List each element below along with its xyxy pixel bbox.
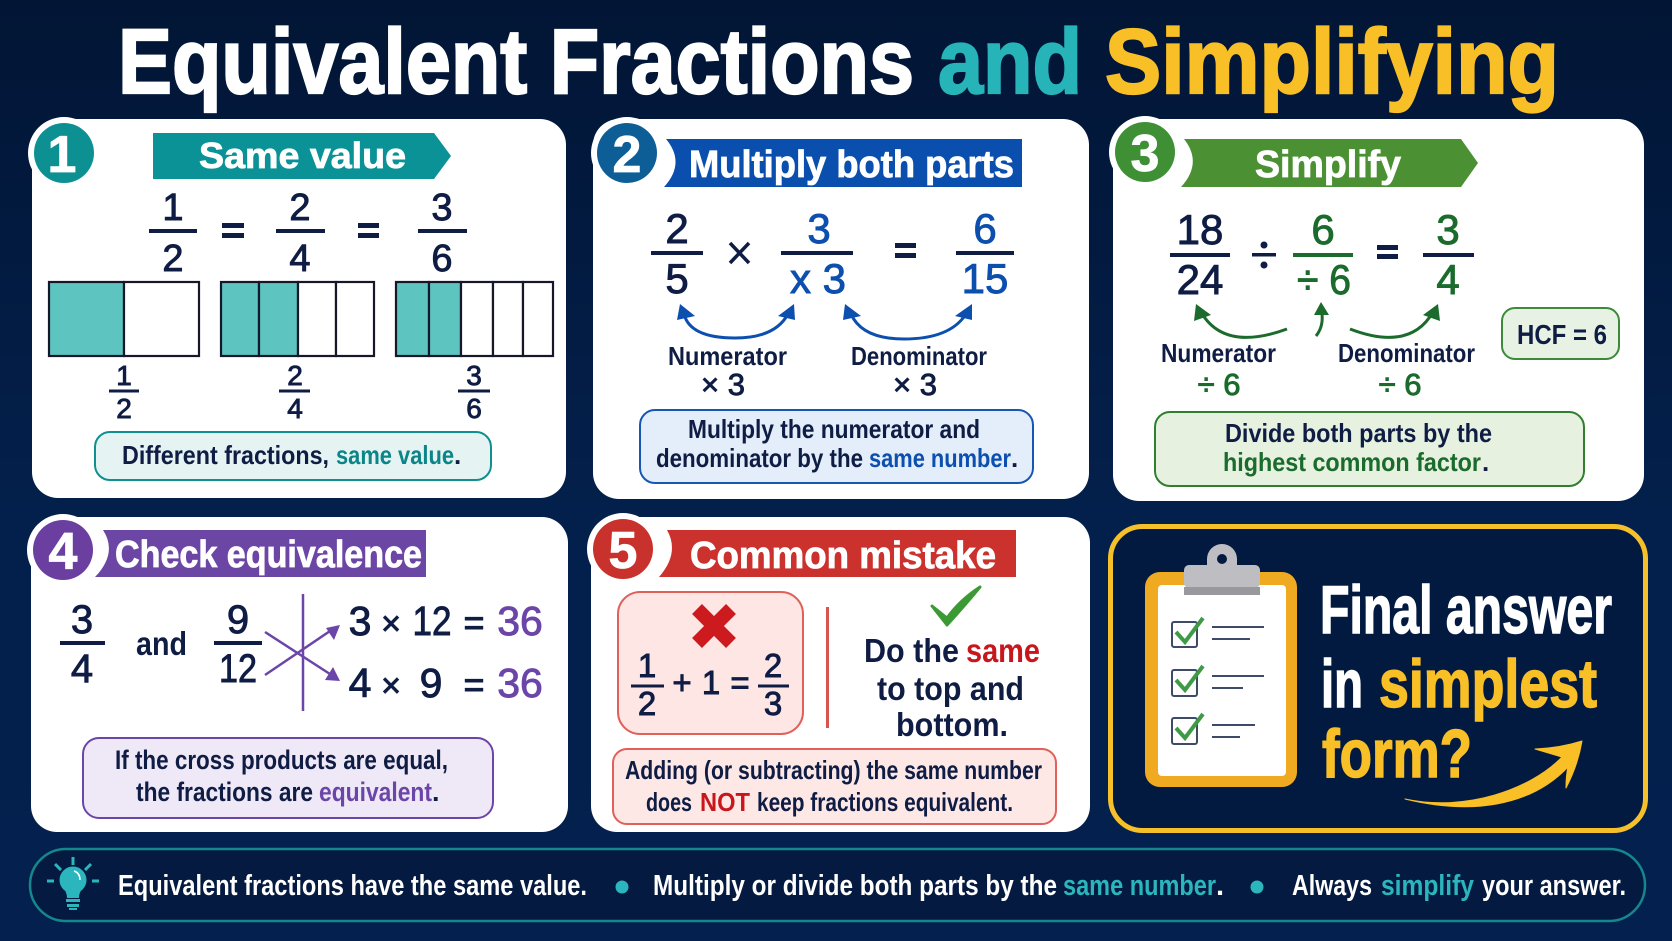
title: and xyxy=(938,11,1082,113)
tip: always simplify: your answer. xyxy=(1482,870,1626,902)
heading ribbon: simplify xyxy=(1181,139,1478,187)
small fraction labels: 4 xyxy=(287,393,303,424)
arrow: denominator multiply xyxy=(843,304,972,339)
badge 4 xyxy=(27,514,99,586)
callout: adding does not keep equivalent xyxy=(613,749,1056,824)
wrong equation: 2 xyxy=(638,685,656,722)
callout: different fractions, same value: Different fractions, xyxy=(122,440,329,470)
label: denominator divide by 6: Denominator xyxy=(1338,338,1475,368)
equation: two fifths times three over three equals six fifteenths: 15 xyxy=(962,255,1008,302)
callout: adding does not keep equivalent: does xyxy=(646,787,692,817)
cross product: 3 x 12 = 36 xyxy=(349,598,543,644)
cross product: 3 x 12 = 36: = xyxy=(463,602,485,643)
heading ribbon: common mistake: Common mistake xyxy=(690,535,996,577)
badge 3: 3 xyxy=(1131,125,1159,183)
wrong equation: + xyxy=(672,664,692,701)
panel 5: common mistake xyxy=(587,513,1090,832)
cross product: 3 x 12 = 36: × xyxy=(381,605,401,643)
title: Simplifying xyxy=(1105,11,1559,113)
arrow: divide denominator xyxy=(1350,304,1440,337)
callout: multiply numerator and denominator: . xyxy=(1011,443,1018,473)
equation: one half equals two quarters equals three sixths: 1 xyxy=(162,187,184,229)
arrow: divide numerator xyxy=(1194,304,1287,337)
callout: adding does not keep equivalent: NOT xyxy=(700,787,750,817)
cross product: 3 x 12 = 36: 3 xyxy=(349,598,371,644)
panel 3: simplify xyxy=(1109,116,1644,501)
title xyxy=(118,11,1559,113)
equation: eighteen twenty-fourths divided by six equals three quarters: 3 xyxy=(1436,206,1460,253)
wrong equation xyxy=(631,647,789,722)
tag: HCF = 6 xyxy=(1502,308,1619,359)
tag: HCF = 6: HCF = 6 xyxy=(1517,319,1607,350)
equation: eighteen twenty-fourths divided by six equals three quarters: ÷ 6 xyxy=(1297,256,1351,303)
fraction: nine twelfths: 12 xyxy=(219,647,257,691)
small fraction labels xyxy=(109,360,490,424)
label: denominator times 3: × 3 xyxy=(893,367,937,402)
equation: two fifths times three over three equals six fifteenths: x 3 xyxy=(790,255,846,302)
tip: multiply or divide: Multiply or divide both parts by the xyxy=(653,870,1057,902)
fraction bar: one half xyxy=(49,282,199,356)
label: numerator divide by 6: ÷ 6 xyxy=(1198,367,1240,402)
label: denominator divide by 6 xyxy=(1338,338,1475,402)
equation: eighteen twenty-fourths divided by six equals three quarters xyxy=(1170,206,1474,303)
equation: eighteen twenty-fourths divided by six equals three quarters: 18 xyxy=(1177,206,1223,253)
callout: multiply numerator and denominator: denominator by the xyxy=(656,443,863,473)
tip: always simplify xyxy=(1292,870,1626,902)
text: final answer in simplest form?: in xyxy=(1321,646,1363,722)
equation: one half equals two quarters equals three sixths: 4 xyxy=(289,238,311,280)
callout: multiply numerator and denominator: Multiply the numerator and xyxy=(688,414,980,444)
icon: light bulb xyxy=(47,857,99,910)
cross product: 4 x 9 = 36 xyxy=(349,660,543,706)
tip: always simplify: Always xyxy=(1292,870,1372,902)
title: Equivalent Fractions xyxy=(118,11,914,113)
badge 3 xyxy=(1109,116,1181,188)
tip: equivalent fractions: Equivalent fractions have the same value. xyxy=(118,870,587,902)
small fraction labels: 1 xyxy=(116,360,132,391)
text: do the same to top and bottom xyxy=(864,632,1040,743)
label: numerator divide by 6 xyxy=(1161,338,1276,402)
badge 5 xyxy=(587,513,659,585)
callout: different fractions, same value: . xyxy=(454,440,461,470)
small fraction labels: 2 xyxy=(116,393,132,424)
callout: adding does not keep equivalent: Adding (or subtracting) the same number xyxy=(625,755,1042,785)
heading ribbon: check equivalence: Check equivalence xyxy=(115,534,422,576)
text: do the same to top and bottom: bottom. xyxy=(896,706,1008,743)
callout: different fractions, same value: same value xyxy=(336,440,454,470)
equation: two fifths times three over three equals six fifteenths xyxy=(651,205,1014,302)
fraction: nine twelfths: 9 xyxy=(227,598,249,642)
callout: divide by highest common factor: . xyxy=(1482,447,1489,477)
callout: divide by highest common factor xyxy=(1155,412,1584,486)
equation: two fifths times three over three equals six fifteenths: 6 xyxy=(973,205,997,252)
heading ribbon: same value xyxy=(153,133,451,179)
arrow: HCF up xyxy=(1314,302,1329,336)
panel 4: check equivalence xyxy=(27,514,568,832)
text: do the same to top and bottom: same xyxy=(966,632,1040,669)
arrow: numerator multiply xyxy=(677,304,795,338)
divider line xyxy=(826,607,829,728)
label: numerator times 3: × 3 xyxy=(701,367,745,402)
label: numerator times 3: Numerator xyxy=(668,341,787,371)
badge 5: 5 xyxy=(609,522,637,580)
callout: multiply numerator and denominator: same number xyxy=(869,443,1011,473)
equation: one half equals two quarters equals three sixths: 3 xyxy=(431,187,453,229)
equation: two fifths times three over three equals six fifteenths: 5 xyxy=(665,255,689,302)
icon: red cross xyxy=(697,609,731,643)
fraction: three quarters: 3 xyxy=(71,598,93,642)
separator dot xyxy=(1250,880,1264,894)
word: and: and xyxy=(136,625,187,662)
callout: cross products equal: equivalent xyxy=(319,777,432,807)
text: final answer in simplest form? xyxy=(1320,572,1612,792)
equation: two fifths times three over three equals six fifteenths: 3 xyxy=(807,205,831,252)
callout: cross products equal: . xyxy=(432,777,440,807)
callout: cross products equal: If the cross products are equal, xyxy=(115,745,448,775)
badge 2: 2 xyxy=(613,126,641,184)
small fraction labels: 6 xyxy=(466,393,482,424)
fraction bar: two quarters xyxy=(221,282,374,356)
cross product: 4 x 9 = 36: 9 xyxy=(420,660,442,706)
badge 4: 4 xyxy=(49,523,78,581)
tip: always simplify: simplify xyxy=(1381,870,1474,902)
tip: multiply or divide: . xyxy=(1216,870,1224,902)
panel 6: final answer xyxy=(1110,526,1646,830)
callout: cross products equal: the fractions are xyxy=(136,777,313,807)
equation: eighteen twenty-fourths divided by six equals three quarters: 4 xyxy=(1436,256,1460,303)
badge 1: 1 xyxy=(48,126,76,184)
text: do the same to top and bottom: Do the xyxy=(864,632,959,669)
equation: one half equals two quarters equals three sixths: 2 xyxy=(162,238,184,280)
fraction: nine twelfths xyxy=(214,598,262,691)
wrong equation: 2 xyxy=(764,647,782,684)
wrong equation: = xyxy=(730,664,750,701)
cross product: 4 x 9 = 36: 4 xyxy=(349,660,371,706)
label: numerator times 3 xyxy=(668,341,787,402)
wrong example box xyxy=(618,592,803,734)
heading ribbon: same value: Same value xyxy=(199,135,406,176)
heading ribbon: multiply both parts: Multiply both parts xyxy=(689,144,1014,186)
fraction: three quarters xyxy=(60,598,105,691)
cross product: 4 x 9 = 36: = xyxy=(463,664,485,705)
panel 1: same value xyxy=(28,117,566,498)
equation: two fifths times three over three equals six fifteenths: 2 xyxy=(665,205,689,252)
separator dot xyxy=(616,880,628,894)
wrong equation: 1 xyxy=(702,664,720,701)
callout: divide by highest common factor: Divide both parts by the xyxy=(1225,418,1492,448)
equation: one half equals two quarters equals three sixths: 6 xyxy=(431,238,453,280)
icon: clipboard checklist xyxy=(1145,544,1297,787)
text: final answer in simplest form?: simplest xyxy=(1379,646,1597,722)
wrong equation: 1 xyxy=(638,647,656,684)
callout: divide by highest common factor: highest common factor xyxy=(1223,447,1481,477)
cross multiplication arrows xyxy=(265,594,340,711)
equation: eighteen twenty-fourths divided by six equals three quarters: 24 xyxy=(1177,256,1223,303)
wrong equation: 3 xyxy=(764,685,782,722)
callout: different fractions, same value xyxy=(95,432,491,480)
callout: cross products equal xyxy=(83,738,493,818)
small fraction labels: 2 xyxy=(287,360,303,391)
label: numerator divide by 6: Numerator xyxy=(1161,338,1276,368)
icon: green check xyxy=(932,587,980,625)
cross product: 3 x 12 = 36: 36 xyxy=(497,598,543,644)
label: denominator times 3 xyxy=(851,341,987,402)
cross product: 4 x 9 = 36: × xyxy=(381,667,401,705)
equation: eighteen twenty-fourths divided by six equals three quarters: 6 xyxy=(1311,206,1335,253)
fraction: three quarters: 4 xyxy=(71,647,93,691)
callout: adding does not keep equivalent: keep fractions equivalent. xyxy=(757,787,1013,817)
cross product: 3 x 12 = 36: 12 xyxy=(412,598,452,644)
badge 1 xyxy=(28,117,100,189)
equation: one half equals two quarters equals three sixths: 2 xyxy=(289,187,311,229)
label: denominator times 3: Denominator xyxy=(851,341,987,371)
cross product: 4 x 9 = 36: 36 xyxy=(497,660,543,706)
callout: multiply numerator and denominator xyxy=(640,410,1033,483)
text: final answer in simplest form?: form? xyxy=(1322,716,1472,792)
tip: multiply or divide: same number xyxy=(1063,870,1216,902)
panel 2: multiply both parts xyxy=(591,117,1089,499)
badge 2 xyxy=(591,117,663,189)
small fraction labels: 3 xyxy=(466,360,482,391)
bottom tip bar xyxy=(30,849,1645,921)
arrow: yellow swoosh xyxy=(1405,741,1582,807)
text: do the same to top and bottom: to top and xyxy=(877,670,1024,707)
equation: one half equals two quarters equals three sixths xyxy=(149,187,467,280)
label: denominator divide by 6: ÷ 6 xyxy=(1379,367,1421,402)
fraction bar: three sixths xyxy=(396,282,553,356)
heading ribbon: simplify: Simplify xyxy=(1255,144,1401,186)
